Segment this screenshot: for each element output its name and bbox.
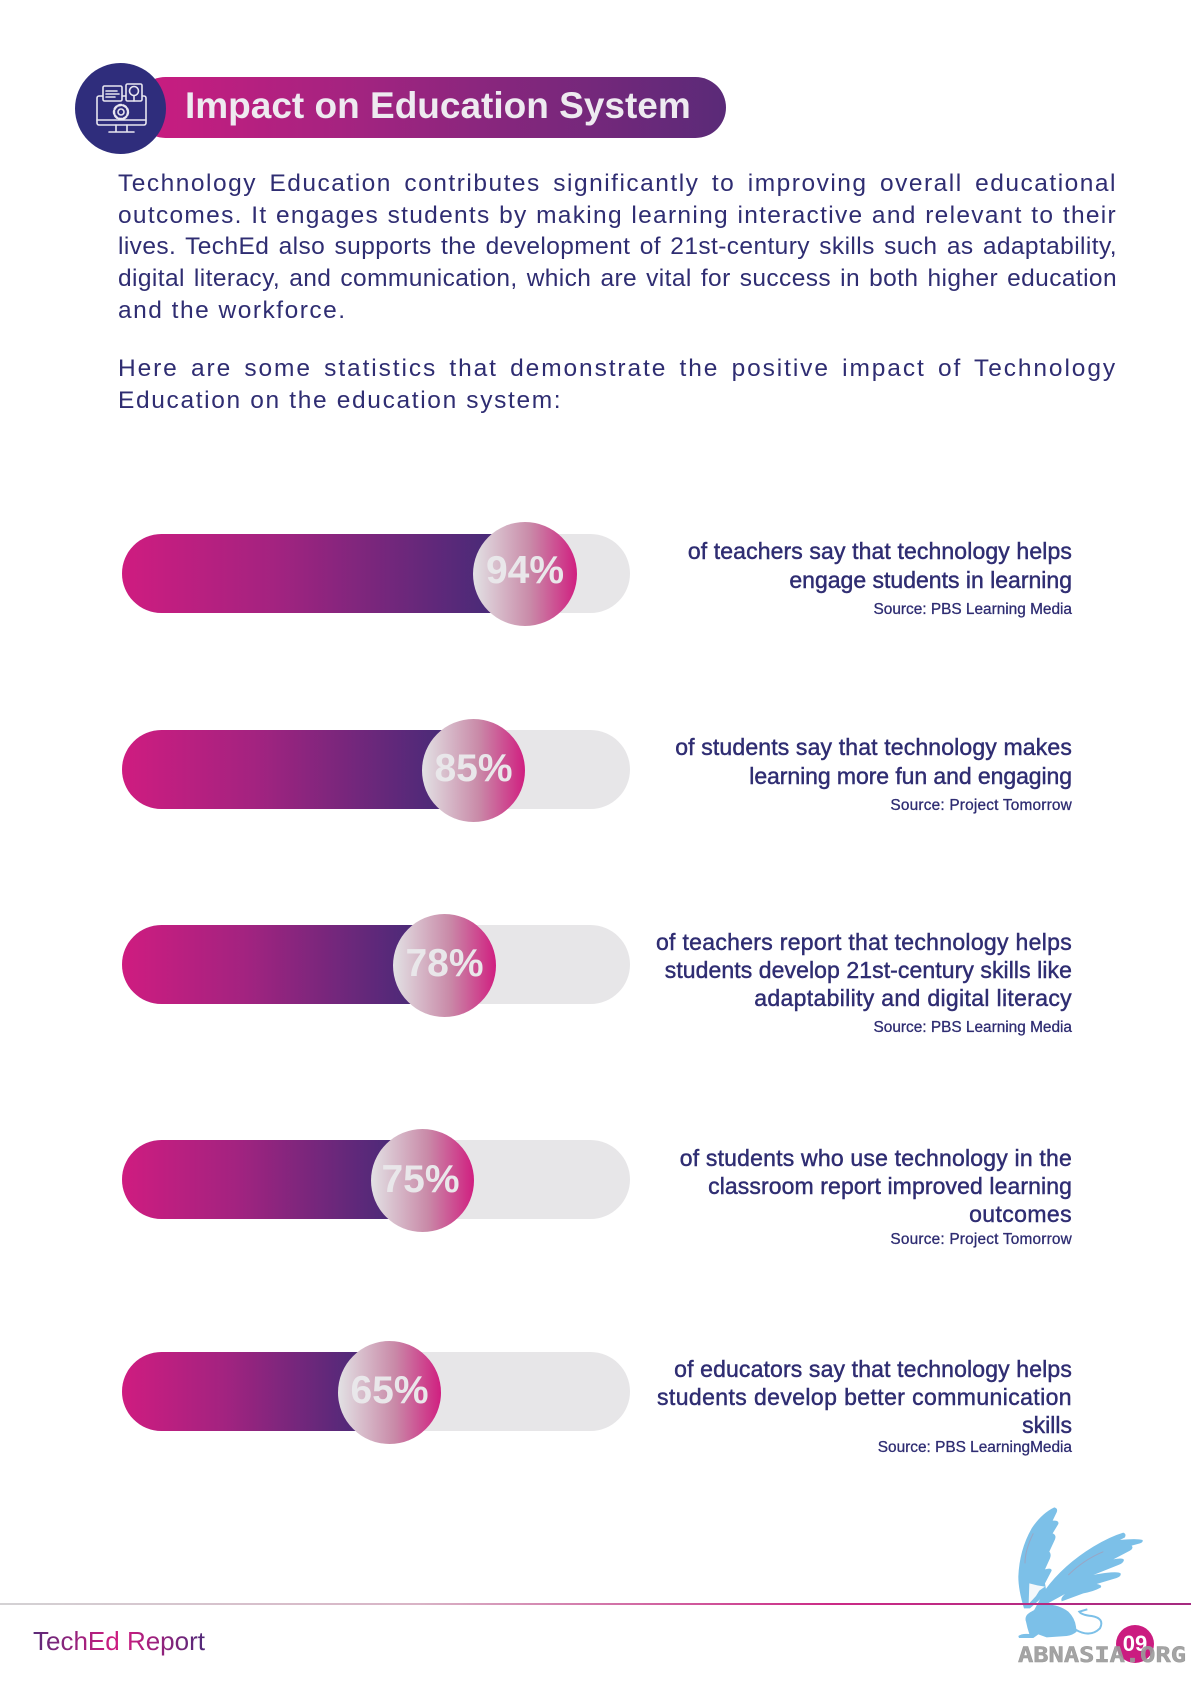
stat text: 65%: students develop better communication (657, 1384, 1072, 1410)
intro paragraph: and the workforce. (118, 297, 347, 324)
progress bar: 78% (122, 925, 630, 1004)
progress bar: 85%: 85% (434, 747, 513, 790)
stat text: 85%: learning more fun and engaging (749, 763, 1072, 789)
watermark text: ABNASIA.ORG (1018, 1643, 1186, 1667)
stat text: 65% (657, 1356, 1072, 1456)
stat text: 85%: of students say that technology makes (675, 734, 1072, 760)
stat text: 85%: Source: Project Tomorrow (890, 797, 1072, 814)
stat text: 94%: engage students in learning (789, 567, 1072, 593)
footer label: TechEd Report: TechEd Report (33, 1626, 205, 1656)
stat text: 75% (680, 1145, 1072, 1248)
statistics lead-in text: Here are some statistics that demonstrate the positive impact of Technology (118, 355, 1117, 382)
stat text: 94% (688, 538, 1072, 618)
statistics lead-in text: Education on the education system: (118, 387, 562, 414)
stat text: 78%: adaptability and digital literacy (754, 985, 1072, 1011)
stat text: 65%: of educators say that technology helps (674, 1356, 1072, 1382)
progress bar: 85% (122, 730, 630, 809)
statistics lead-in text (118, 355, 1117, 414)
progress bar: 75%: 75% (381, 1158, 460, 1201)
intro paragraph: Technology Education contributes significantly to improving overall educational (118, 170, 1117, 197)
progress bar: 75% (122, 1140, 630, 1219)
stat text: 75%: classroom report improved learning (708, 1173, 1072, 1199)
heading pill with title: Impact on Education System (185, 85, 691, 126)
stat text: 75%: outcomes (969, 1201, 1072, 1227)
stat text: 78%: Source: PBS Learning Media (874, 1019, 1072, 1036)
heading pill with title (135, 77, 726, 138)
progress bar: 78%: 78% (405, 942, 484, 985)
stat text: 75%: Source: Project Tomorrow (890, 1231, 1072, 1248)
progress bar: 65%: 65% (350, 1369, 429, 1412)
header banner (75, 63, 726, 154)
stat text: 94%: of teachers say that technology helps (688, 538, 1072, 564)
stat text: 78% (656, 929, 1072, 1036)
intro paragraph (118, 170, 1117, 324)
stat text: 78%: students develop 21st-century skills like (665, 957, 1072, 983)
griffin logo (1018, 1507, 1143, 1638)
intro paragraph: lives. TechEd also supports the development of 21st-century skills such as adaptability, (118, 233, 1117, 260)
footer rule (0, 1603, 1191, 1605)
intro paragraph: digital literacy, and communication, which are vital for success in both higher education (118, 265, 1117, 292)
page number badge (1116, 1625, 1154, 1663)
stat text: 75%: of students who use technology in the (680, 1145, 1072, 1171)
stat text: 78%: of teachers report that technology helps (656, 929, 1072, 955)
stat text: 65%: skills (1022, 1412, 1072, 1438)
page number badge: 09 (1123, 1631, 1147, 1656)
icon: computer with gear in navy circle (75, 63, 166, 154)
progress bar: 94%: 94% (486, 549, 564, 592)
stat text: 85% (675, 734, 1072, 814)
stat text: 65%: Source: PBS LearningMedia (878, 1439, 1072, 1456)
progress bar: 65% (122, 1352, 630, 1431)
intro paragraph: outcomes. It engages students by making learning interactive and relevant to their (118, 202, 1117, 229)
stat text: 94%: Source: PBS Learning Media (874, 601, 1072, 618)
progress bar: 94% (122, 534, 630, 613)
